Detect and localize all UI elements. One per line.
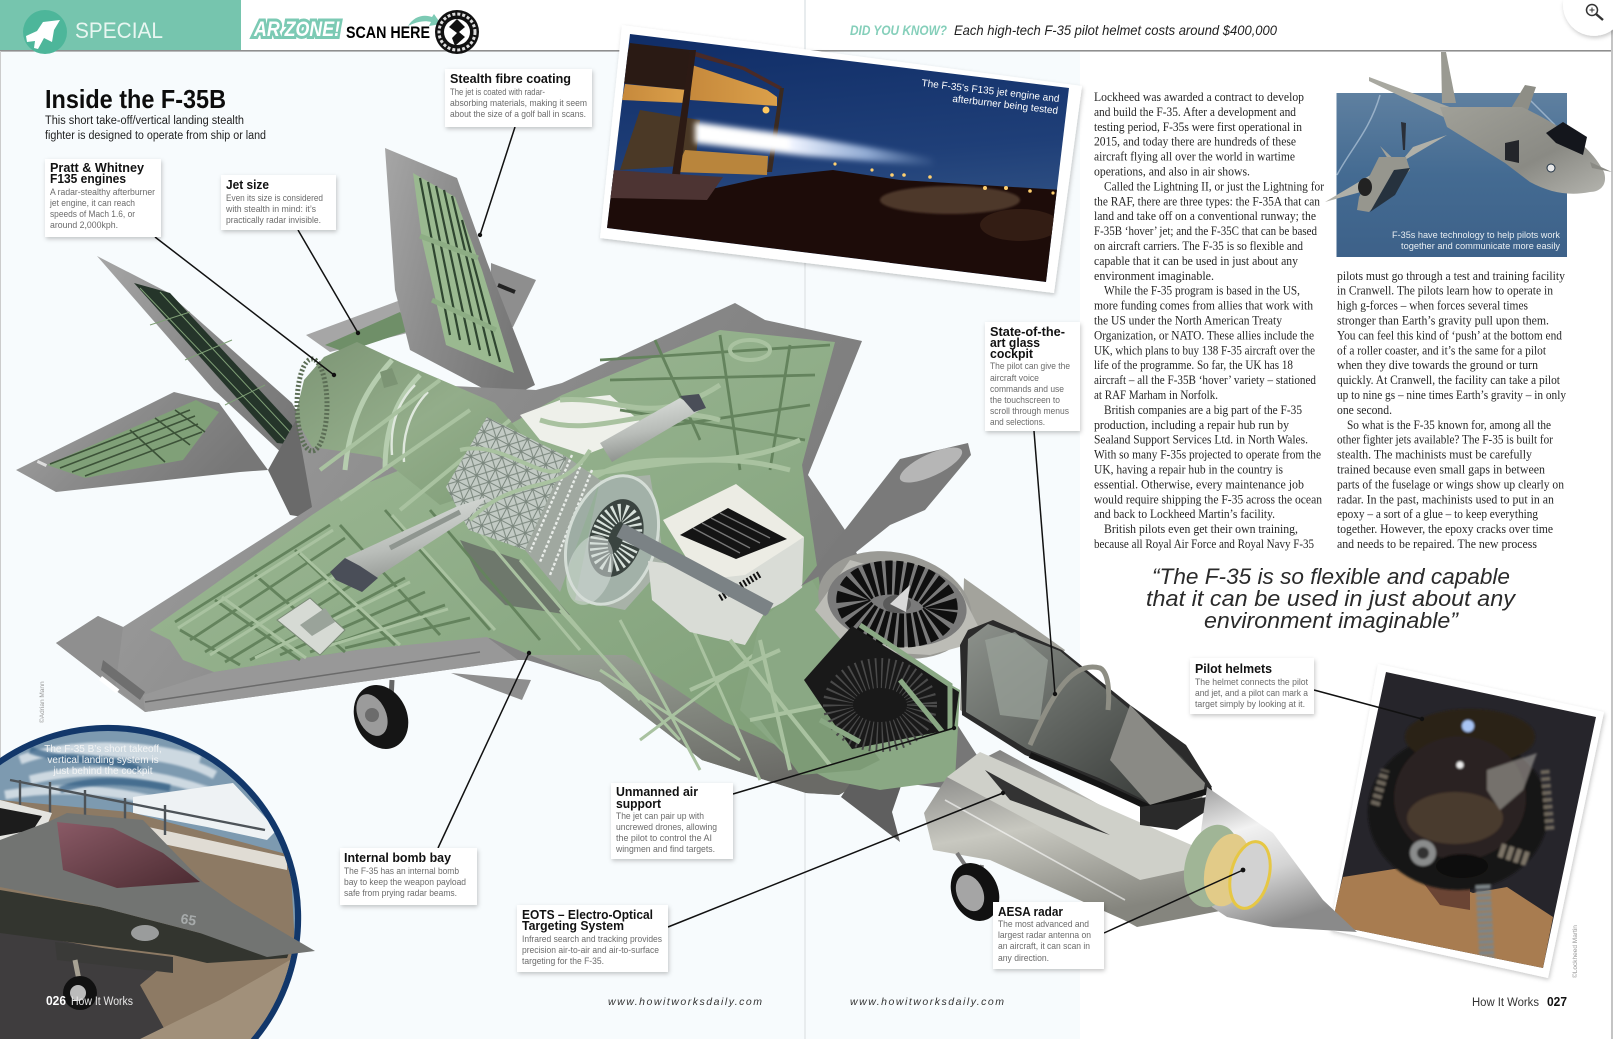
callout: Unmanned air support: support	[616, 797, 662, 811]
title block	[45, 84, 266, 142]
canopy	[960, 620, 1212, 812]
callout: Pilot helmets: target simply by looking at it.	[1195, 698, 1305, 709]
body text column two: stronger than Earth’s gravity pull upon them.	[1337, 314, 1549, 328]
body text column one: F-35B ‘hover’ jet; and the F-35C that can be based	[1094, 224, 1318, 238]
body text column two: and needs to be repaired. The new process	[1337, 537, 1537, 551]
icon: AR roundel	[435, 10, 479, 54]
body text column one: capable that it can be used in just about any	[1094, 254, 1299, 268]
folio: left page: How It Works	[71, 996, 133, 1008]
AR zone banner	[253, 10, 479, 54]
wing panel fitting	[277, 340, 770, 655]
rear stabilizer left	[16, 392, 268, 492]
body text column one: production, including a repair hub run by	[1094, 418, 1290, 432]
photo caption: just behind the cockpit	[53, 766, 153, 777]
icon: jet in circle	[23, 10, 67, 54]
body text column one: Sealand Support Services Ltd. in North Wales.	[1094, 433, 1308, 447]
body text column two: in Cranwell. The pilots learn how to operate in	[1337, 284, 1554, 298]
nose gear	[942, 853, 1008, 929]
callout: Pilot helmets: The helmet connects the pilot	[1195, 676, 1308, 687]
callout: State-of-the-art glass cockpit: and selections.	[990, 416, 1045, 427]
large jet	[1369, 52, 1612, 194]
leader line: bomb bay	[438, 651, 531, 848]
callout: Internal bomb bay: bay to keep the weapon payload	[344, 876, 466, 887]
callout: EOTS: targeting for the F-35.	[522, 955, 604, 966]
photo caption	[920, 78, 1060, 117]
body text column one: essential. Otherwise, every maintenance job	[1094, 477, 1304, 491]
pull quote: that it can be used in just about any	[1146, 586, 1517, 611]
leader line: AESA radar	[1104, 868, 1245, 933]
leader line: EOTS	[668, 791, 1005, 927]
body text column two: pilots must go through a test and training facility	[1337, 269, 1566, 283]
body text column two: You can feel this kind of ‘push’ at the bottom end	[1337, 328, 1563, 342]
callout: Internal bomb bay	[340, 848, 477, 905]
leader line: unmanned air support	[733, 726, 956, 794]
callout: Jet size: Even its size is considered	[226, 192, 323, 203]
callout: Pratt and Whitney engines	[45, 159, 161, 237]
fuselage green front section	[690, 580, 960, 790]
body text column one: Lockheed was awarded a contract to develop	[1094, 90, 1304, 104]
callout: EOTS	[517, 905, 668, 972]
leader line: cockpit	[1034, 431, 1057, 696]
lift fan housing	[807, 536, 985, 674]
body text column two: quickly. At Cranwell, the facility can take a pilot	[1337, 373, 1560, 387]
black canopy sill	[1030, 755, 1212, 808]
callout: State-of-the-art glass cockpit: scroll through menus	[990, 405, 1069, 416]
body text column two: up to nine gs – nine times Earth’s gravity – in only	[1337, 388, 1567, 402]
body text column one: because all Royal Air Force and Royal Navy F-35	[1094, 537, 1314, 551]
F-35B cutaway illustration	[16, 148, 1357, 932]
callout: State-of-the-art glass cockpit	[985, 322, 1080, 431]
callout: Unmanned air support: the pilot to control the AI	[616, 832, 712, 843]
callout: Stealth fibre coating: absorbing materials, making it seem	[450, 97, 587, 108]
callout: Pilot helmets: Pilot helmets	[1195, 662, 1272, 676]
callout: Unmanned air support: wingmen and find targets.	[615, 843, 715, 854]
right stabilizer behind fin	[306, 263, 536, 352]
callout: Internal bomb bay: safe from prying radar beams.	[344, 887, 457, 898]
callout: Pratt and Whitney engines: jet engine, it can reach	[49, 197, 135, 208]
photo: two F-35s over sea	[1325, 52, 1612, 257]
chin fuselage	[924, 750, 1225, 927]
engine fan	[550, 464, 674, 616]
body text column one: and back to Lockheed Martin’s facility.	[1094, 507, 1275, 521]
callout: Unmanned air support: The jet can pair up with	[616, 810, 704, 821]
carrier jet fuselage	[0, 813, 315, 1010]
pull quote: environment imaginable”	[1204, 608, 1460, 633]
icon: scan arrow	[408, 14, 441, 26]
callout: Unmanned air support: Unmanned air	[616, 785, 698, 799]
callout: EOTS: EOTS – Electro-Optical	[522, 908, 653, 922]
small jet	[1325, 122, 1447, 212]
did you know strip: Each high-tech F-35 pilot helmet costs around $400,000	[954, 22, 1277, 38]
callout: Pratt and Whitney engines: around 2,000kph.	[50, 219, 118, 230]
callout: Jet size: practically radar invisible.	[226, 214, 321, 225]
callout: Pratt and Whitney engines: speeds of Mach 1.6, or	[50, 208, 135, 219]
callout: AESA radar: any direction.	[998, 952, 1049, 963]
zoom button	[1563, 0, 1613, 36]
body text column one: on aircraft carriers. The F-35 is so flexible and	[1094, 239, 1304, 253]
photo: F-35B on carrier deck, circular	[0, 720, 315, 1039]
folio: right page: 027	[1547, 994, 1567, 1009]
body text column one: UK, having a repair hub in the country is	[1094, 462, 1283, 476]
body text column two: trained because even small gaps in between	[1337, 462, 1546, 476]
callout: AESA radar: an aircraft, it can scan in	[998, 940, 1090, 951]
callout: State-of-the-art glass cockpit: The pilot can give the	[990, 360, 1070, 371]
photo caption	[1392, 230, 1560, 252]
body text column one: land and take off on a conventional runway; the	[1094, 209, 1316, 223]
pull quote	[1146, 564, 1517, 633]
underside fin	[841, 770, 902, 842]
callout: Jet size: Jet size	[226, 178, 269, 192]
photo caption: The F-35's F135 jet engine and	[921, 78, 1060, 105]
body text column one: While the F-35 program is based in the US,	[1104, 284, 1300, 298]
photo: engine and afterburner test	[600, 25, 1082, 293]
title block: fighter is designed to operate from ship or land	[45, 130, 266, 142]
body text column one: Called the Lightning II, or just the Lightning for	[1104, 179, 1325, 193]
body text column two: radar. In the past, machinists used to put in an	[1337, 492, 1555, 506]
body text column two	[1337, 269, 1567, 551]
dark engine bay floor	[460, 540, 570, 615]
callout: Jet size	[221, 175, 336, 230]
callout: Pratt and Whitney engines: Pratt & Whitney	[50, 161, 144, 175]
body text column two: together. However, the epoxy cracks over time	[1337, 522, 1553, 536]
body text column one: life of the programme. So far, the UK has 18	[1094, 358, 1293, 372]
body text column one: British companies are a big part of the F-35	[1104, 403, 1302, 417]
body text column one: more funding comes from allies that work with	[1094, 299, 1314, 313]
lower fuselage skin	[530, 655, 885, 795]
pull quote: “The F-35 is so flexible and capable	[1152, 564, 1510, 589]
section header: special	[0, 0, 241, 54]
body text column one: aircraft flying all over the world in wartime	[1094, 150, 1295, 164]
body text column one: the RAF, there are three types: the F-35A that can	[1094, 194, 1321, 208]
title block: This short take-off/vertical landing stealth	[45, 115, 244, 127]
leader line: jet size	[298, 230, 360, 335]
photo: pilot helmet	[1330, 660, 1610, 980]
engine nozzle	[295, 342, 535, 510]
body text column one: the US under the North American Treaty	[1094, 314, 1283, 328]
body text column one: and build the F-35. After a development and	[1094, 105, 1297, 119]
body text column one	[1094, 90, 1325, 551]
callout: State-of-the-art glass cockpit: cockpit	[990, 347, 1034, 361]
leader line: engines	[155, 237, 336, 377]
callout: Pilot helmets: and jet, and a pilot can mark a	[1195, 687, 1309, 698]
body text column one: UK, which plans to buy 138 F-35 aircraft over the	[1094, 343, 1315, 357]
callout: State-of-the-art glass cockpit: art glass	[990, 336, 1040, 350]
callout: Stealth fibre coating: about the size of a golf ball in scans.	[450, 108, 586, 119]
photo caption: together and communicate more easily	[1401, 241, 1560, 252]
rear flap under fuselage	[451, 673, 531, 700]
leader line: pilot helmets	[1314, 690, 1424, 721]
body text column one: aircraft – all the F-35B ‘hover’ variety – stationed	[1094, 373, 1317, 387]
photo caption: vertical landing system is	[47, 755, 159, 766]
missile left	[330, 497, 487, 592]
body text column two: of a roller coaster, and it’s the same for a pilot	[1337, 343, 1546, 357]
title block: Inside the F-35B	[45, 84, 226, 114]
body text column one: 2015, and today there are hundreds of these	[1094, 135, 1296, 149]
callout: State-of-the-art glass cockpit: State-of-the-	[990, 325, 1065, 339]
body text column one: operations, and also in air shows.	[1094, 164, 1250, 178]
upper fuselage behind fan	[960, 578, 1065, 740]
callout: Stealth fibre coating	[445, 69, 592, 127]
electronics box and fuel tank	[648, 484, 804, 645]
body text column one: would require shipping the F-35 across the ocean	[1094, 492, 1323, 506]
leader line: stealth fibre coating	[478, 127, 515, 237]
missile right	[600, 394, 706, 462]
website url right: www.howitworksdaily.com	[850, 996, 1004, 1008]
callout: State-of-the-art glass cockpit: commands and use	[990, 383, 1064, 394]
drive shaft	[620, 530, 770, 610]
callout: EOTS: precision air-to-air and air-to-surface	[522, 944, 659, 955]
photo caption: afterburner being tested	[952, 94, 1059, 117]
callout: AESA radar	[993, 902, 1104, 969]
photo caption: F-35s have technology to help pilots work	[1392, 230, 1560, 241]
photo caption: The F-35 B’s short takeoff,	[44, 744, 162, 755]
callout: Internal bomb bay: Internal bomb bay	[344, 851, 451, 865]
heading: SPECIAL: SPECIAL	[75, 18, 163, 43]
main vertical tail	[385, 148, 535, 400]
body text column one: With so many F-35s projected to operate from the	[1094, 448, 1321, 462]
AR zone banner: AR ZONE!	[253, 18, 340, 41]
callout: EOTS: Infrared search and tracking provides	[522, 933, 662, 944]
callout: EOTS: Targeting System	[522, 919, 624, 933]
callout: Internal bomb bay: The F-35 has an internal bomb	[344, 865, 459, 876]
body text column two: when they dive towards the ground or turn	[1337, 358, 1539, 372]
body text column two: stealth. The machinists must be carefully	[1337, 448, 1533, 462]
carrier jet fuselage: 65	[179, 910, 198, 929]
website url left: www.howitworksdaily.com	[608, 996, 762, 1008]
callout: State-of-the-art glass cockpit: the touchscreen to	[990, 394, 1060, 405]
callout: Stealth fibre coating: Stealth fibre coating	[450, 72, 571, 86]
credit: illustrator: ©Adrian Mann	[38, 681, 46, 723]
callout: AESA radar: largest radar antenna on	[998, 929, 1091, 940]
body text column one: British pilots even get their own training,	[1104, 522, 1298, 536]
body text column one: Organization, or NATO. These allies include the	[1094, 328, 1314, 342]
roll fan cavity	[804, 625, 959, 749]
body text column two: high g-forces – when forces several times	[1337, 299, 1528, 313]
folio: right page	[1472, 994, 1567, 1009]
body text column two: one second.	[1337, 403, 1392, 417]
body text column two: other fighter jets available? The F-35 is built for	[1337, 433, 1554, 447]
radar bulkhead and nose cone	[1176, 787, 1357, 932]
engine core mesh	[446, 417, 600, 592]
lift door	[801, 441, 971, 586]
AR zone banner: SCAN HERE	[346, 24, 430, 42]
callout: AESA radar: The most advanced and	[998, 918, 1089, 929]
nose fairing upper	[1110, 705, 1205, 810]
main wing and fuselage panel	[56, 303, 980, 795]
main gear left	[344, 676, 418, 758]
open white bay	[520, 395, 650, 455]
callout: Jet size: with stealth in mind: it’s	[225, 203, 316, 214]
body text column one: environment imaginable.	[1094, 269, 1214, 283]
left tail fin	[97, 256, 330, 470]
did you know strip: DID YOU KNOW?	[850, 23, 947, 38]
photo caption	[44, 744, 162, 777]
folio: left page	[46, 993, 133, 1008]
callout: State-of-the-art glass cockpit: aircraft voice	[990, 372, 1039, 383]
body text column two: parts of the fuselage or wings show up clearly on	[1337, 477, 1565, 491]
callout: AESA radar: AESA radar	[998, 905, 1063, 919]
dark forward bay	[1140, 797, 1208, 830]
callout: Pilot helmets	[1190, 658, 1314, 714]
folio: right page: How It Works	[1472, 997, 1539, 1009]
credit: Lockheed Martin: ©Lockheed Martin	[1571, 925, 1579, 978]
wing ribs	[175, 335, 830, 780]
radar dish	[1223, 837, 1277, 913]
folio: left page: 026	[46, 993, 66, 1008]
body text column one: at RAF Marham in Norfolk.	[1094, 388, 1218, 402]
callout: Unmanned air support: uncrewed drones, allowing	[616, 821, 717, 832]
body text column two: epoxy – a sort of a glue – to keep everything	[1337, 507, 1539, 521]
body text column one: testing period, F-35s were first operational in	[1094, 120, 1303, 134]
callout: Pratt and Whitney engines: A radar-stealthy afterburner	[50, 186, 155, 197]
callout: Pratt and Whitney engines: F135 engines	[50, 172, 126, 186]
callout: Stealth fibre coating: The jet is coated with radar-	[450, 86, 545, 97]
body text column two: So what is the F-35 known for, among all the	[1347, 418, 1551, 432]
shadow between stabilizer and wing	[268, 420, 330, 520]
callout: Unmanned air support	[611, 783, 733, 859]
